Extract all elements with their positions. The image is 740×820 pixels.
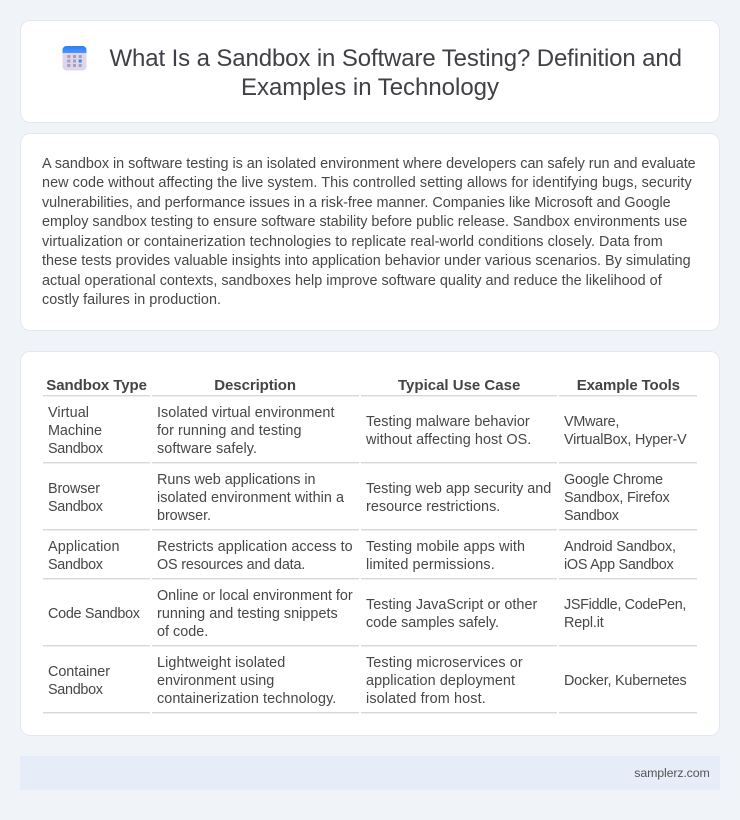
table header: Example Tools <box>577 377 680 394</box>
table header: Typical Use Case <box>398 377 520 394</box>
row: Browser Sandbox: Runs web applications in <box>157 472 316 488</box>
row: Browser Sandbox: Sandbox <box>564 508 620 524</box>
row: Container Sandbox: Docker, Kubernetes <box>564 673 687 689</box>
row: Browser Sandbox <box>48 472 670 524</box>
row: Code Sandbox: Repl.it <box>564 615 604 631</box>
row: Virtual Machine Sandbox: Sandbox <box>48 441 104 457</box>
text block: intro paragraph: these tests provides valuable insights into application behavior under various scenarios. By simulating <box>42 253 691 269</box>
row: Browser Sandbox: Google Chrome <box>564 472 663 488</box>
row: Application Sandbox: Application <box>48 539 120 555</box>
panel: title card <box>20 20 720 123</box>
row: Code Sandbox: Testing JavaScript or other <box>366 597 538 613</box>
row: Container Sandbox: isolated from host. <box>366 691 486 707</box>
icon: calendar grid <box>62 46 86 70</box>
row: Virtual Machine Sandbox: VMware, <box>564 414 619 430</box>
title: What Is a Sandbox in Software Testing? Definition and <box>110 45 682 72</box>
table header: Sandbox Type <box>46 377 147 394</box>
row: Virtual Machine Sandbox: Testing malware behavior <box>366 414 530 430</box>
row: Code Sandbox: running and testing snippets <box>157 606 338 622</box>
row: Code Sandbox: Online or local environment for <box>157 588 353 604</box>
row: Browser Sandbox: Testing web app security and <box>366 481 551 497</box>
text block: intro paragraph: employ sandbox testing to ensure software stability before public release. Sandbox environments use <box>42 214 687 230</box>
row: Virtual Machine Sandbox: software safely. <box>157 441 257 457</box>
row: Application Sandbox <box>48 539 676 573</box>
row: Container Sandbox: Sandbox <box>48 682 104 698</box>
title: Examples in Technology <box>241 74 499 101</box>
row: Virtual Machine Sandbox: Machine <box>48 423 102 439</box>
row: Virtual Machine Sandbox: Isolated virtual environment <box>157 405 334 421</box>
row: Application Sandbox: limited permissions. <box>366 557 495 573</box>
row: Application Sandbox: OS resources and data. <box>157 557 305 573</box>
table header: Description <box>214 377 296 394</box>
title <box>110 45 682 101</box>
row: Browser Sandbox: Sandbox <box>48 499 104 515</box>
row: Browser Sandbox: Sandbox, Firefox <box>564 490 670 506</box>
row: Application Sandbox: Restricts application access to <box>157 539 353 555</box>
row: Container Sandbox: Testing microservices or <box>366 655 523 671</box>
text block: intro paragraph: vulnerabilities, and performance issues in a risk-free manner. Companies like Microsoft and Google <box>42 195 671 211</box>
row: Code Sandbox <box>48 588 686 640</box>
text block: intro paragraph <box>42 156 696 308</box>
text block: intro paragraph: A sandbox in software testing is an isolated environment where developers can safely run and evaluate <box>42 156 696 172</box>
row: Container Sandbox: containerization technology. <box>157 691 336 707</box>
row: Virtual Machine Sandbox: Virtual <box>48 405 89 421</box>
row: Application Sandbox: Testing mobile apps with <box>366 539 525 555</box>
row: Virtual Machine Sandbox: without affecting host OS. <box>365 432 531 448</box>
row: Browser Sandbox: browser. <box>157 508 211 524</box>
footer source text: samplerz.com <box>634 766 710 780</box>
text block: intro paragraph: costly failures in production. <box>42 292 221 308</box>
row: Code Sandbox: JSFiddle, CodePen, <box>564 597 686 613</box>
row: Container Sandbox: application deployment <box>366 673 515 689</box>
row: Browser Sandbox: Browser <box>48 481 100 497</box>
text block: intro paragraph: actual operational contexts, sandboxes help improve software quality and reduce the likelihood of <box>42 273 663 289</box>
panel: intro paragraph card <box>20 133 720 331</box>
text block: intro paragraph: virtualization or containerization technologies to replicate real-world conditions closely. Data from <box>42 234 663 250</box>
row: Code Sandbox: code samples safely. <box>366 615 499 631</box>
row: Virtual Machine Sandbox: for running and testing <box>157 423 302 439</box>
row: Application Sandbox: iOS App Sandbox <box>564 557 674 573</box>
row: Container Sandbox: environment using <box>157 673 274 689</box>
row: Code Sandbox: Code Sandbox <box>48 606 141 622</box>
row: Code Sandbox: of code. <box>157 624 208 640</box>
panel: sandbox types table card <box>20 351 720 736</box>
row: Container Sandbox: Lightweight isolated <box>157 655 285 671</box>
row: Application Sandbox: Sandbox <box>48 557 104 573</box>
row: Browser Sandbox: resource restrictions. <box>366 499 500 515</box>
row: Browser Sandbox: isolated environment within a <box>157 490 344 506</box>
row: Container Sandbox <box>48 655 687 707</box>
table: sandbox types <box>43 377 697 713</box>
row: Application Sandbox: Android Sandbox, <box>564 539 676 555</box>
row: Virtual Machine Sandbox <box>48 405 687 457</box>
row: Container Sandbox: Container <box>48 664 110 680</box>
row: Virtual Machine Sandbox: VirtualBox, Hyper-V <box>564 432 687 448</box>
text block: intro paragraph: new code without affecting the live system. This controlled setting allows for identifying bugs, security <box>42 175 692 191</box>
footer bar <box>20 756 720 790</box>
table header <box>46 377 680 394</box>
